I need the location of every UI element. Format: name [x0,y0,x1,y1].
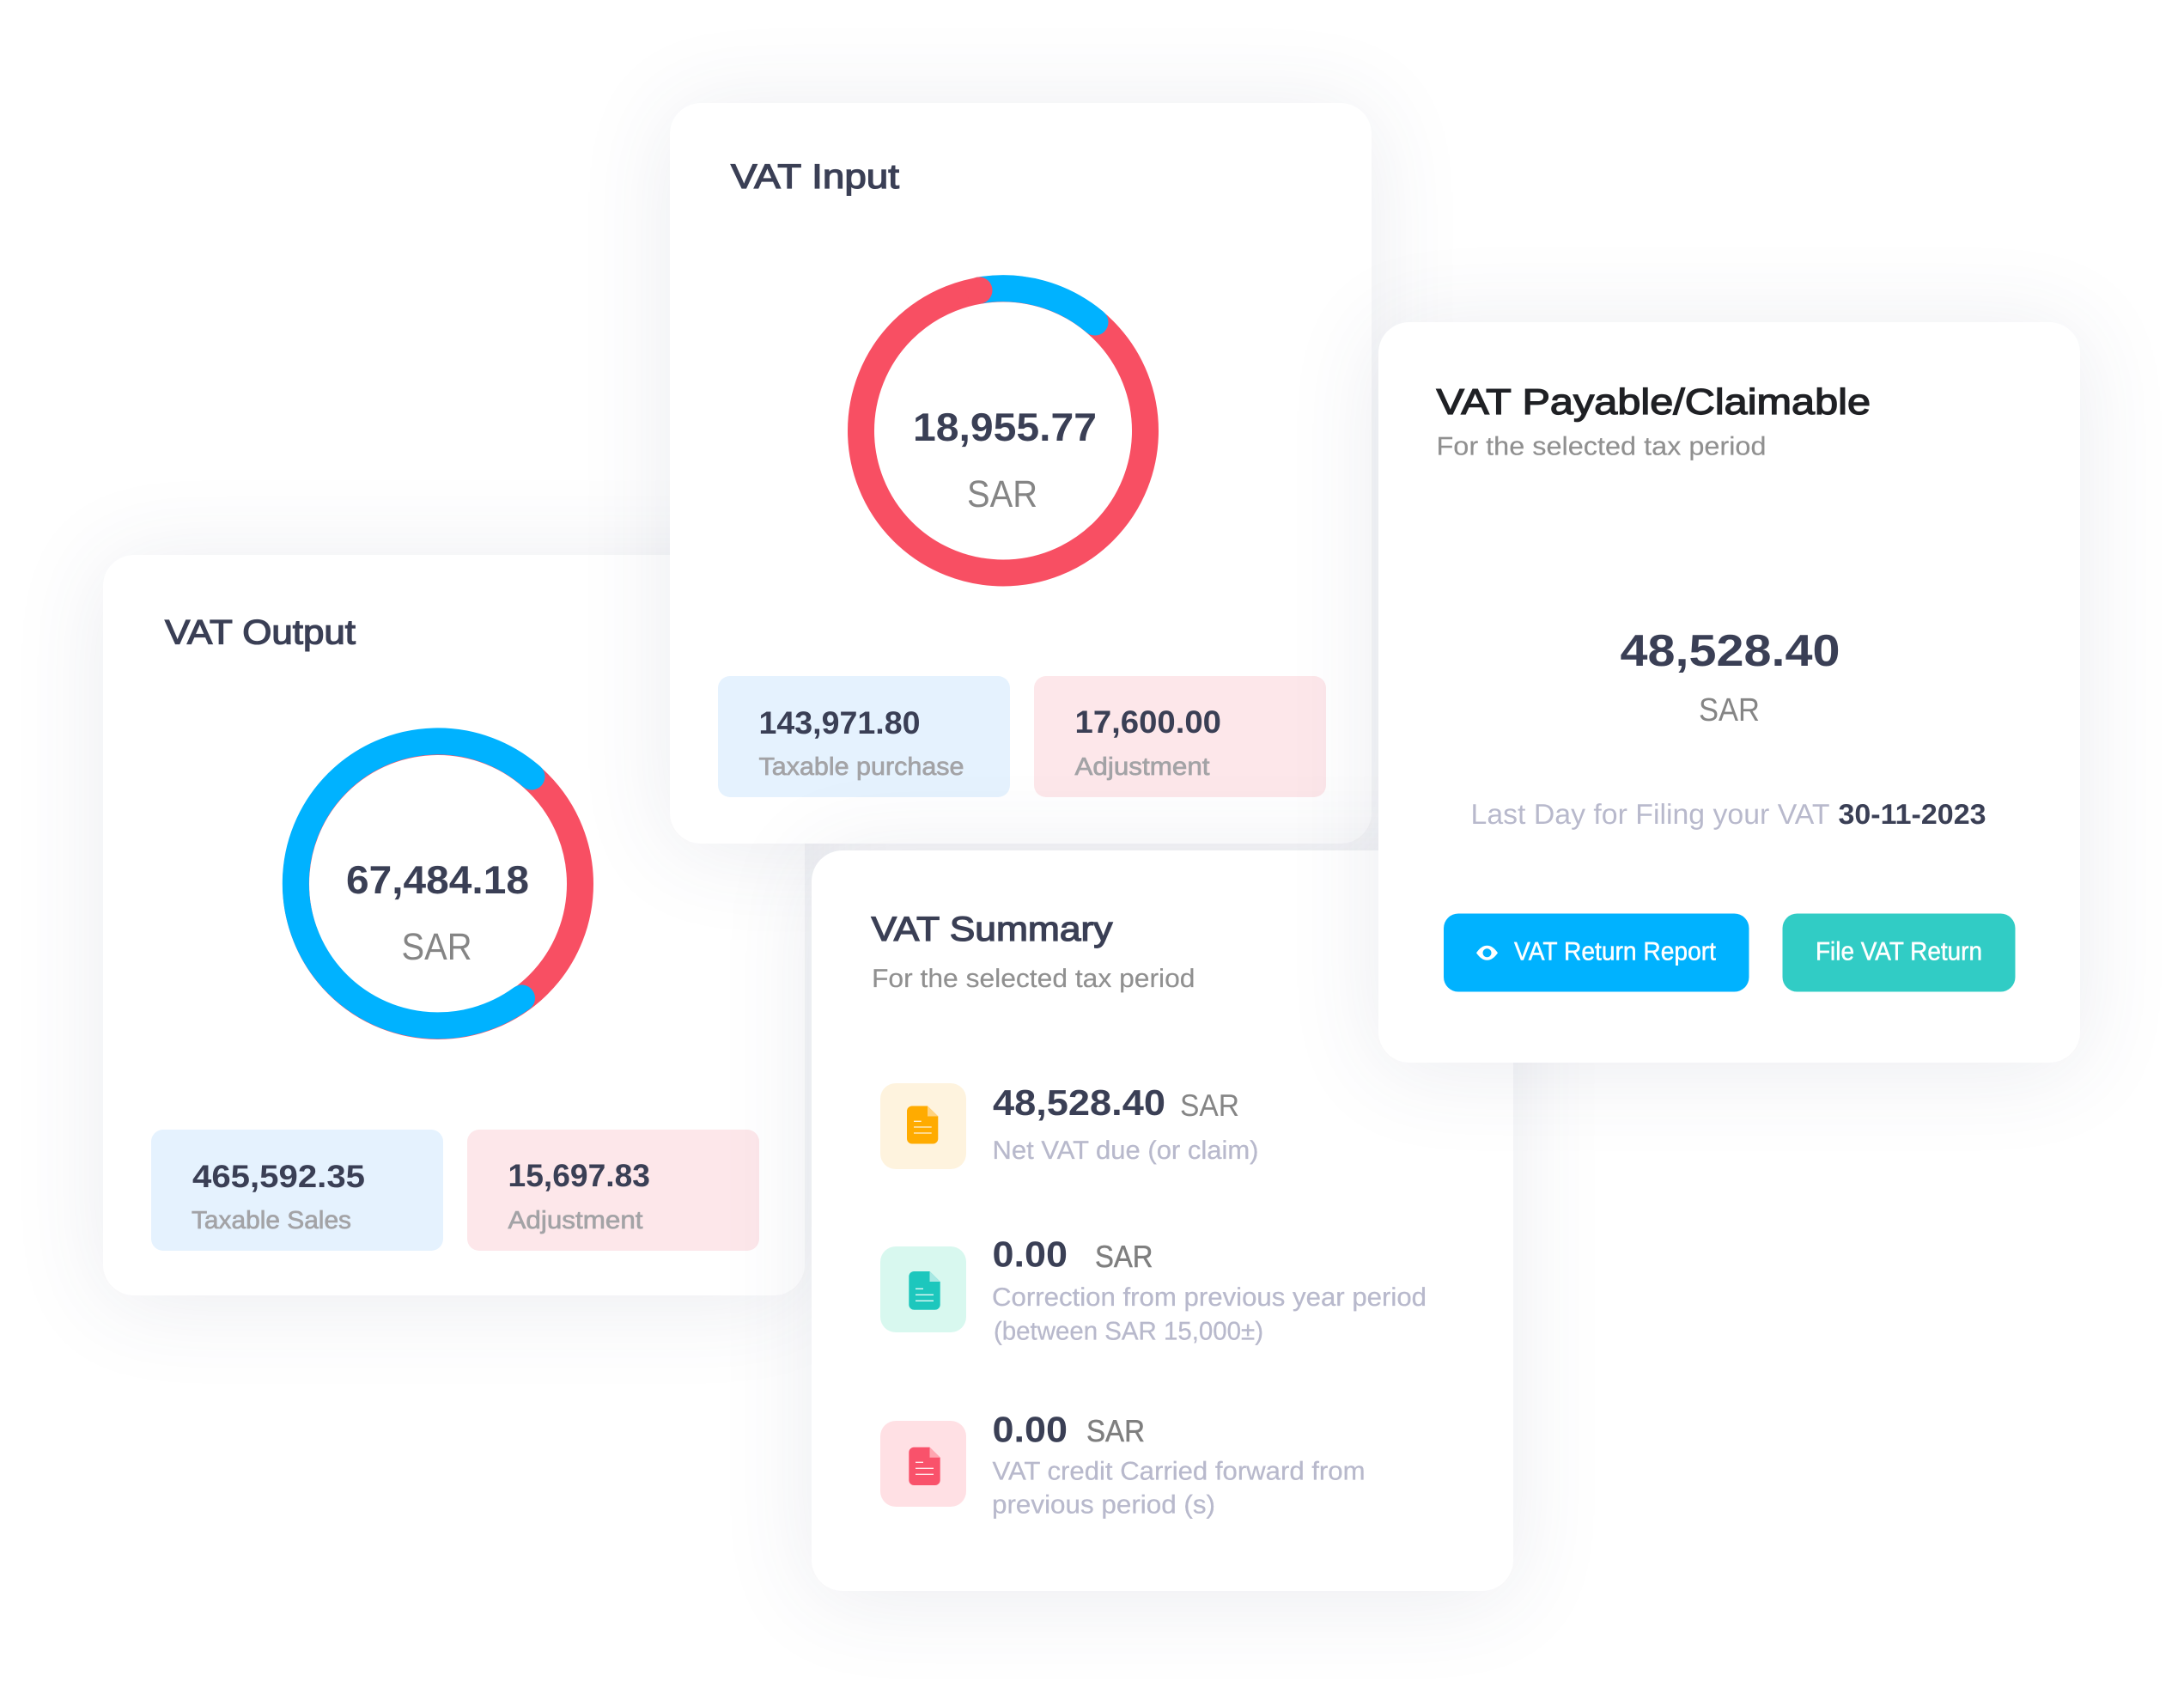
stat box: adjustment: 15,697.83 [508,1158,650,1193]
button: VAT Return Report [1444,914,1749,991]
summary row: correction: (between SAR 15,000±) [994,1318,1263,1345]
summary row: net VAT due: 48,528.40 [993,1082,1165,1123]
icon: orange document [880,1083,966,1169]
stat box: taxable sales: Taxable Sales [192,1207,351,1234]
summary row: correction [992,1234,1427,1345]
summary row: net VAT due: Net VAT due (or claim) [993,1136,1259,1165]
summary row: correction: 0.00 [993,1234,1068,1275]
donut value: 67,484.18 [346,857,529,902]
subheading: For the selected tax period [872,965,1195,993]
icon: teal document [880,1246,966,1332]
summary row: credit carried forward [992,1409,1366,1519]
donut chart: VAT Input [861,277,1146,573]
summary row: net VAT due: SAR [1180,1088,1239,1123]
stat box: taxable sales: 465,592.35 [192,1159,365,1194]
heading: VAT Input: VAT Input [731,158,899,196]
summary row: credit carried forward: VAT credit Carried forward from [993,1457,1366,1486]
summary row: correction: Correction from previous year period [992,1283,1427,1312]
icon: red document [880,1421,966,1507]
donut unit: SAR [967,473,1037,515]
summary row: correction: SAR [1095,1239,1153,1274]
heading: VAT Summary: VAT Summary [871,911,1113,948]
stat box: adjustment: Adjustment [508,1207,642,1234]
stat box: adjustment: 17,600.00 [1075,704,1221,740]
stat box: taxable purchase: Taxable purchase [759,753,964,781]
summary row: credit carried forward: SAR [1086,1413,1145,1448]
stat box: taxable purchase [718,676,1010,797]
payable unit: SAR [1699,692,1760,728]
filing deadline text: 30-11-2023 [1838,798,1986,830]
summary row: credit carried forward: 0.00 [993,1409,1068,1450]
stat box: taxable purchase: 143,971.80 [759,705,921,740]
stat box: adjustment [1034,676,1326,797]
stat box: adjustment: Adjustment [1075,753,1209,781]
heading: VAT Output: VAT Output [165,613,356,651]
panel: VAT Payable/Claimable [1378,322,2080,1063]
donut value: 18,955.77 [913,405,1097,449]
stat box: taxable sales [151,1130,443,1251]
panel: VAT Summary [812,850,1513,1591]
filing deadline text: Last Day for Filing your VAT [1470,798,1829,830]
panel: VAT Output [103,555,805,1295]
donut chart: VAT Output [295,741,581,1026]
donut unit: SAR [402,926,472,968]
stat box: adjustment [467,1130,759,1251]
panel: VAT Input [670,103,1372,844]
button: File VAT Return: File VAT Return [1816,938,1982,966]
payable amount: 48,528.40 [1620,626,1840,676]
button: VAT Return Report: VAT Return Report [1514,938,1717,966]
button: File VAT Return [1783,914,2015,991]
filing deadline text [1470,798,1986,830]
heading: VAT Payable/Claimable: VAT Payable/Claimable [1436,381,1871,422]
summary row: credit carried forward: previous period (s) [992,1491,1215,1519]
summary row: net VAT due [993,1082,1259,1165]
subheading: For the selected tax period [1436,433,1766,460]
